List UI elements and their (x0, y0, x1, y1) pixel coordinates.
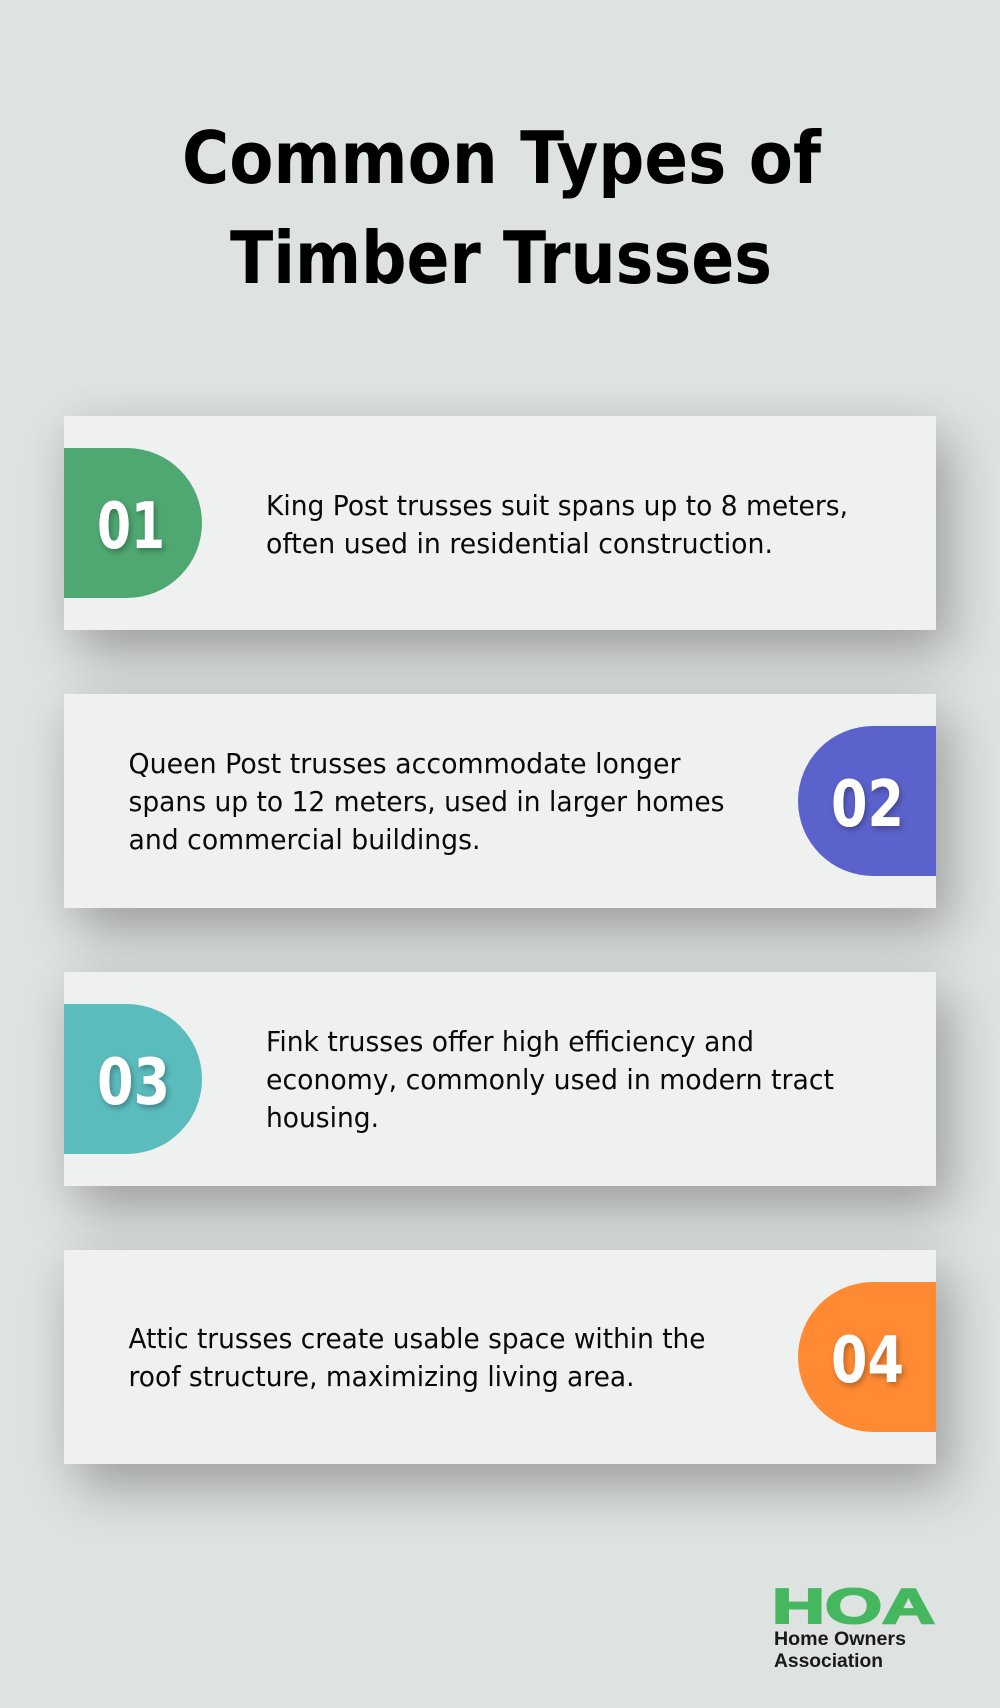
text block 01: King Post trusses suit spans up to 8 meters, (266, 489, 848, 522)
panel: card 01 King Post (64, 416, 936, 630)
badge 03: 03 (97, 1046, 170, 1120)
text block 04: Attic trusses create usable space within the (128, 1322, 706, 1355)
text block 02 (128, 747, 724, 856)
text block 04: roof structure, maximizing living area. (128, 1360, 634, 1393)
title: Timber Trusses (230, 216, 772, 300)
badge 02 (798, 726, 936, 876)
badge 04 (798, 1282, 936, 1432)
panel: card 03 Fink (64, 972, 936, 1186)
text block 03: housing. (266, 1101, 379, 1134)
text block 01 (266, 489, 848, 560)
panel: card 04 Attic (64, 1250, 936, 1464)
logo: HOA: HOA (772, 1580, 935, 1634)
text block 02: Queen Post trusses accommodate longer (128, 747, 681, 780)
badge 01: 01 (97, 490, 165, 564)
text block 03: Fink trusses offer high efficiency and (266, 1025, 754, 1058)
text block 02: and commercial buildings. (128, 823, 480, 856)
text block 04 (128, 1322, 706, 1393)
logo: HOA: Association (774, 1651, 883, 1672)
text block 03: economy, commonly used in modern tract (266, 1063, 834, 1096)
title: Common Types of (182, 116, 822, 200)
badge 02: 02 (831, 768, 904, 842)
text block 02: spans up to 12 meters, used in larger homes (128, 785, 724, 818)
badge 04: 04 (831, 1324, 904, 1398)
title (182, 116, 822, 300)
logo: HOA: Home Owners (774, 1629, 906, 1650)
panel: card 02 Queen Post (64, 694, 936, 908)
text block 01: often used in residential construction. (266, 527, 773, 560)
text block 03 (266, 1025, 834, 1134)
badge 03 (64, 1004, 202, 1154)
badge 01 (64, 448, 202, 598)
